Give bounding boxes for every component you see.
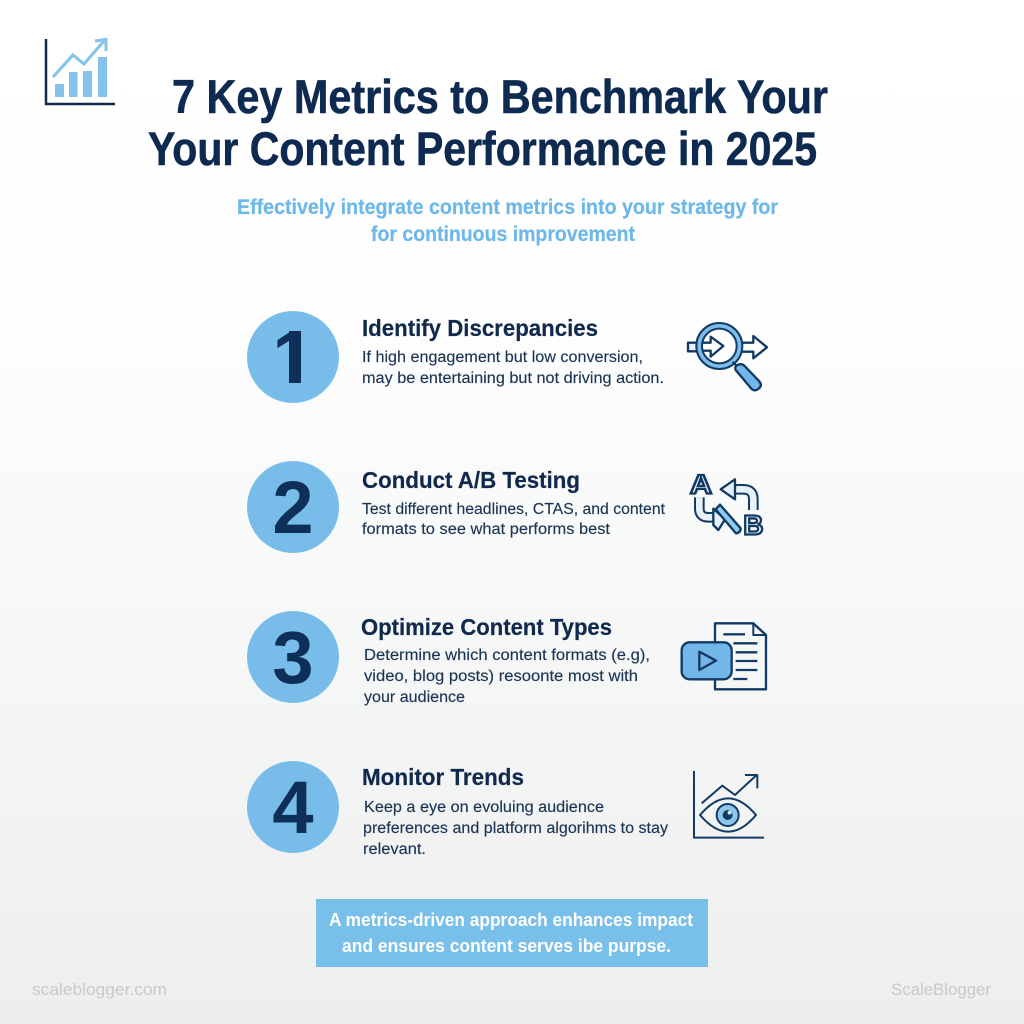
panel: step 1 identify discrepancies bbox=[247, 311, 767, 403]
panel: step 4 monitor trends bbox=[247, 761, 764, 858]
number badge 2: 2 bbox=[272, 466, 314, 549]
heading: monitor trends: Monitor Trends bbox=[362, 764, 524, 790]
text: step 3 description: Determine which content formats (e.g), bbox=[364, 647, 650, 664]
icon: eye on trend chart bbox=[694, 771, 764, 838]
icon: a/b swap arrows: B bbox=[743, 510, 763, 541]
text: step 1 description: If high engagement but low conversion, bbox=[362, 349, 643, 366]
text: step 2 description bbox=[362, 501, 666, 538]
number badge 1 bbox=[247, 311, 339, 403]
text: step 4 description: Keep a eye on evoluing audience bbox=[364, 799, 604, 816]
heading: identify discrepancies: Identify Discrepancies bbox=[362, 315, 598, 341]
number badge 3: 3 bbox=[272, 616, 314, 699]
icon: growth chart logo bbox=[46, 39, 115, 104]
heading: optimize content types: Optimize Content Types bbox=[361, 614, 612, 640]
icon: a/b swap arrows: A bbox=[690, 469, 712, 499]
subtitle: Effectively integrate content metrics into your strategy for bbox=[237, 196, 778, 219]
icon: a/b swap arrows bbox=[690, 469, 763, 541]
title bbox=[148, 70, 828, 175]
footer: brand: ScaleBlogger bbox=[891, 980, 991, 999]
footer: website: scaleblogger.com bbox=[32, 980, 167, 999]
heading: conduct a/b testing: Conduct A/B Testing bbox=[362, 467, 580, 493]
icon: video and document bbox=[682, 623, 766, 689]
text: step 2 description: Test different headlines, CTAS, and content bbox=[362, 501, 666, 518]
text: step 4 description bbox=[363, 799, 668, 858]
callout bbox=[316, 899, 708, 967]
title: Your Content Performance in 2025 bbox=[148, 122, 817, 175]
subtitle bbox=[237, 196, 778, 246]
icon: magnifier over arrow bbox=[688, 323, 767, 390]
text: step 3 description: video, blog posts) resoonte most with bbox=[364, 668, 638, 685]
text: step 4 description: preferences and platform algorihms to stay bbox=[363, 820, 668, 837]
text: step 1 description: may be entertaining but not driving action. bbox=[362, 370, 664, 387]
text: step 4 description: relevant. bbox=[363, 841, 426, 858]
number badge 2 bbox=[247, 461, 339, 553]
text: step 3 description bbox=[364, 647, 650, 706]
text: step 2 description: formats to see what performs best bbox=[362, 521, 611, 538]
panel: step 3 optimize content types bbox=[247, 611, 766, 706]
callout: and ensures content serves ibe purpse. bbox=[342, 935, 671, 956]
text: step 3 description: your audience bbox=[364, 689, 465, 706]
subtitle: for continuous improvement bbox=[371, 223, 635, 246]
title: 7 Key Metrics to Benchmark Your bbox=[172, 70, 828, 123]
number badge 3 bbox=[247, 611, 339, 703]
number badge 1: 1 bbox=[272, 316, 314, 399]
number badge 4: 4 bbox=[272, 766, 314, 849]
text: step 1 description bbox=[362, 349, 664, 387]
number badge 4 bbox=[247, 761, 339, 853]
callout: A metrics-driven approach enhances impact bbox=[329, 909, 693, 930]
panel: step 2 conduct a/b testing bbox=[247, 461, 763, 553]
